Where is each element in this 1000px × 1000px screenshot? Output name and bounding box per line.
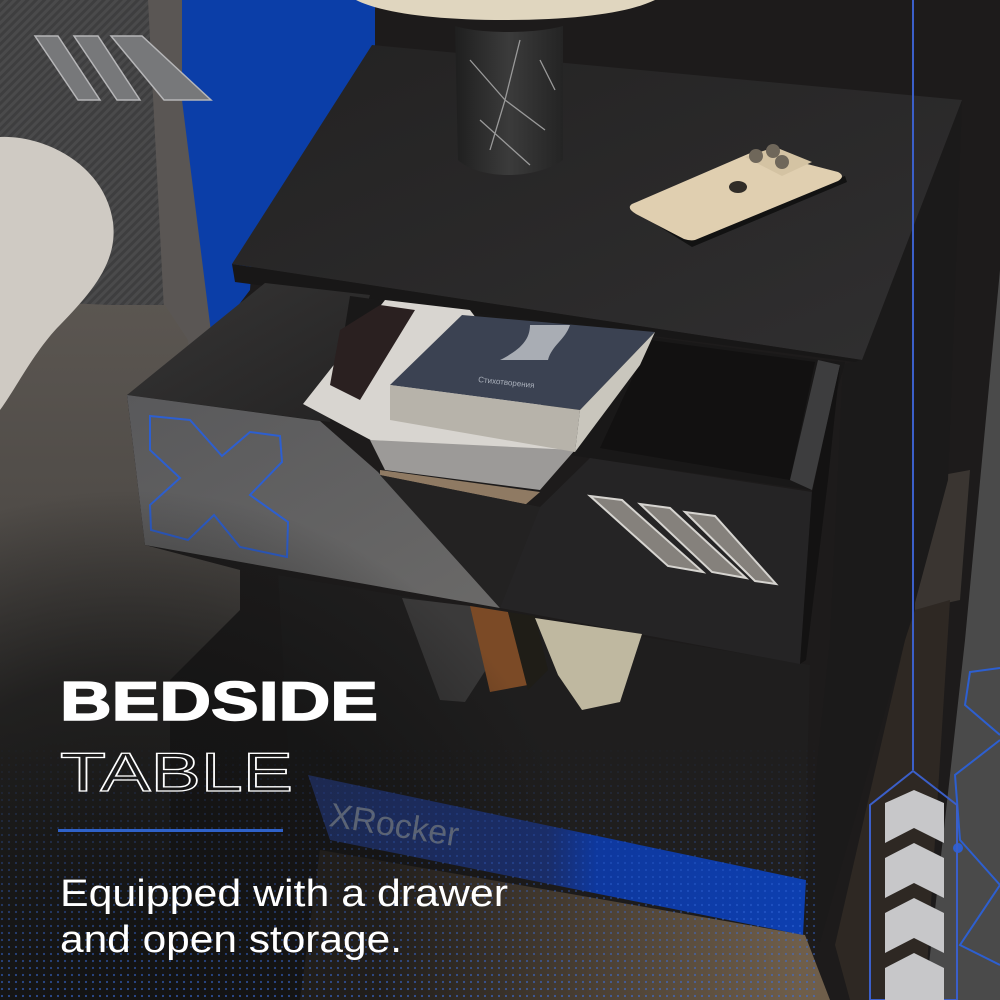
books on the open shelf [402, 598, 642, 710]
open drawer interior [127, 283, 845, 490]
heading: BEDSIDE [60, 670, 378, 732]
right pale panel [925, 270, 1000, 1000]
phone [628, 144, 847, 247]
table top [232, 45, 962, 360]
headboard panel [0, 0, 212, 350]
grey diagonal panel [127, 395, 500, 608]
vertical blue line [912, 0, 914, 770]
bed base [0, 300, 240, 1000]
headboard chevron stripes logo [35, 36, 211, 100]
description text [60, 873, 508, 961]
right circuit lines [954, 668, 1000, 965]
drawer front [127, 365, 840, 664]
white book [303, 300, 575, 470]
drawer stripes [590, 496, 776, 584]
lamp [356, 0, 655, 175]
description text: and open storage. [60, 919, 402, 961]
books in the drawer [303, 300, 655, 505]
book title: Стихотворения [478, 375, 535, 390]
blue wall light [182, 0, 375, 340]
wood floor [300, 850, 830, 1000]
marble lamp base [455, 26, 563, 175]
table carcass side [800, 100, 962, 942]
lamp shade [356, 0, 655, 20]
pillow [0, 137, 114, 410]
hexagon chevrons badge [870, 771, 957, 1000]
plinth blue with logo [308, 775, 806, 935]
heading: TABLE [60, 741, 293, 803]
divider line [58, 829, 283, 832]
blue poetry book [390, 315, 655, 452]
table lower body [278, 575, 810, 935]
blue X logo outline [150, 416, 288, 557]
dark overlay [0, 490, 1000, 1000]
dotted pattern [0, 740, 820, 1000]
heading [60, 670, 378, 803]
description text: Equipped with a drawer [60, 873, 508, 915]
brand logo: XRocker [327, 796, 461, 854]
